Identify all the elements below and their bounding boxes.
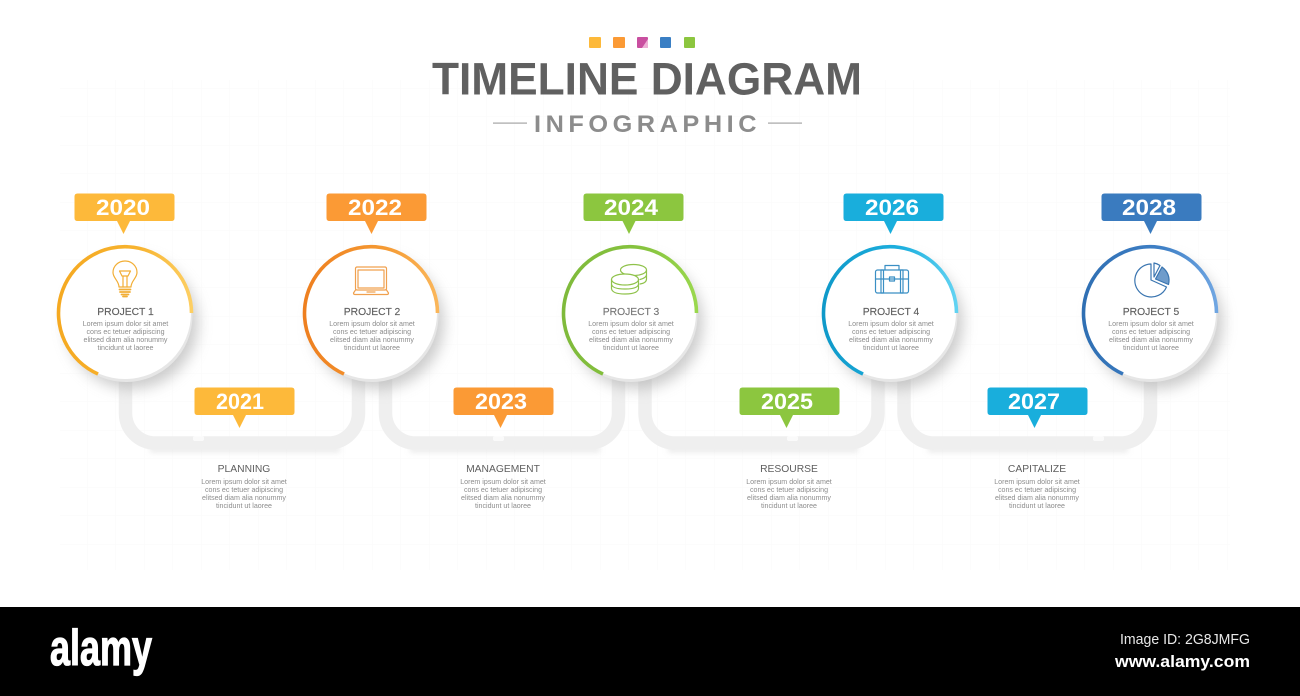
year tag 2022 — [326, 194, 426, 234]
text block: resourse: elitsed diam alia nonummy — [747, 494, 831, 502]
year tag 2027: 2027 — [1008, 389, 1060, 414]
project 5 text: Lorem ipsum dolor sit amet — [1108, 320, 1194, 328]
panel: project 5 — [1084, 247, 1223, 389]
text block: capitalize: Lorem ipsum dolor sit amet — [994, 478, 1080, 486]
text block: resourse: cons ec tetuer adipiscing — [750, 486, 828, 494]
text block: management — [460, 464, 546, 510]
image id: Image ID: 2G8JMFG — [1120, 631, 1250, 648]
project 4 title: PROJECT 4 — [863, 307, 919, 318]
project 4 text: tincidunt ut laoree — [863, 344, 919, 352]
year tag 2026 — [844, 194, 944, 234]
project 4 text — [848, 320, 934, 352]
text block: planning: cons ec tetuer adipiscing — [205, 486, 283, 494]
year tag 2020: 2020 — [96, 195, 150, 220]
website: www.alamy.com — [1114, 652, 1250, 671]
title: TIMELINE DIAGRAM — [432, 54, 862, 104]
project 3 text — [588, 320, 674, 352]
text block: planning: elitsed diam alia nonummy — [202, 494, 286, 502]
project 5 text: elitsed diam alia nonummy — [1109, 336, 1193, 344]
year tag 2028: 2028 — [1122, 195, 1176, 220]
text block: capitalize: elitsed diam alia nonummy — [995, 494, 1079, 502]
project 1 text: tincidunt ut laoree — [98, 344, 154, 352]
project 3 text: cons ec tetuer adipiscing — [592, 328, 670, 336]
project 1 text: elitsed diam alia nonummy — [84, 336, 168, 344]
project 2 text: elitsed diam alia nonummy — [330, 336, 414, 344]
text block: capitalize: cons ec tetuer adipiscing — [998, 486, 1076, 494]
panel: project 3 — [564, 247, 703, 389]
text block: planning: Lorem ipsum dolor sit amet — [201, 478, 287, 486]
project 1 text: cons ec tetuer adipiscing — [86, 328, 165, 336]
project 1 title: PROJECT 1 — [97, 307, 154, 318]
project 1 text — [83, 320, 168, 352]
text block: management: MANAGEMENT — [466, 464, 541, 475]
project 5 text: tincidunt ut laoree — [1123, 344, 1179, 352]
panel: project 4 — [824, 247, 963, 389]
text block: management: cons ec tetuer adipiscing — [464, 486, 542, 494]
project 5 text: cons ec tetuer adipiscing — [1112, 328, 1190, 336]
year tag 2020 — [74, 194, 174, 234]
icon: light bulb — [113, 261, 137, 296]
year tag 2024 — [584, 194, 684, 234]
icon: briefcase — [876, 266, 908, 293]
project 5 title: PROJECT 5 — [1123, 307, 1179, 318]
icon: pie chart — [1135, 263, 1169, 297]
text block: capitalize — [994, 464, 1080, 510]
panel: project 2 — [305, 247, 444, 389]
connector track shadows — [150, 447, 1128, 452]
year tag 2023 — [454, 388, 554, 428]
year tag 2021: 2021 — [216, 389, 264, 414]
project 4 text: cons ec tetuer adipiscing — [852, 328, 930, 336]
project 5 text — [1108, 320, 1194, 352]
project 2 title: PROJECT 2 — [344, 307, 400, 318]
project 3 text: Lorem ipsum dolor sit amet — [588, 320, 674, 328]
year tag 2025 — [740, 388, 840, 428]
icon: coins — [612, 264, 646, 294]
text block: management: elitsed diam alia nonummy — [461, 494, 545, 502]
text block: planning — [201, 464, 287, 510]
year tag 2026: 2026 — [865, 195, 919, 220]
year tag 2028 — [1102, 194, 1202, 234]
project 3 text: tincidunt ut laoree — [603, 344, 659, 352]
text block: resourse — [746, 464, 832, 510]
text block: resourse: Lorem ipsum dolor sit amet — [746, 478, 832, 486]
text block: capitalize: CAPITALIZE — [1008, 464, 1066, 475]
project 2 text — [329, 320, 415, 352]
panel: project 1 — [59, 247, 198, 389]
footer watermark bar — [0, 607, 1300, 696]
text block: planning: PLANNING — [218, 464, 270, 475]
project 1 text: Lorem ipsum dolor sit amet — [83, 320, 168, 328]
year tag 2024: 2024 — [604, 195, 659, 220]
text block: resourse: tincidunt ut laoree — [761, 502, 817, 510]
year tag 2023: 2023 — [475, 389, 527, 414]
year tag 2021 — [194, 388, 294, 428]
text block: management: Lorem ipsum dolor sit amet — [460, 478, 546, 486]
project 2 text: tincidunt ut laoree — [344, 344, 400, 352]
project 4 text: elitsed diam alia nonummy — [849, 336, 933, 344]
alamy logo: alamy — [50, 620, 152, 676]
project 2 text: Lorem ipsum dolor sit amet — [329, 320, 415, 328]
project 3 title: PROJECT 3 — [603, 307, 659, 318]
icon: laptop — [354, 267, 388, 294]
connector tracks — [126, 360, 1150, 443]
text block: resourse: RESOURSE — [760, 464, 818, 475]
year tag 2022: 2022 — [348, 195, 402, 220]
colour squares row — [589, 37, 695, 48]
project 4 text: Lorem ipsum dolor sit amet — [848, 320, 934, 328]
year tag 2025: 2025 — [761, 389, 813, 414]
project 2 text: cons ec tetuer adipiscing — [333, 328, 411, 336]
subtitle with side rules: INFOGRAPHIC — [534, 111, 761, 138]
year tag 2027 — [988, 388, 1088, 428]
text block: planning: tincidunt ut laoree — [216, 502, 272, 510]
text block: capitalize: tincidunt ut laoree — [1009, 502, 1065, 510]
text block: management: tincidunt ut laoree — [475, 502, 531, 510]
project 3 text: elitsed diam alia nonummy — [589, 336, 673, 344]
